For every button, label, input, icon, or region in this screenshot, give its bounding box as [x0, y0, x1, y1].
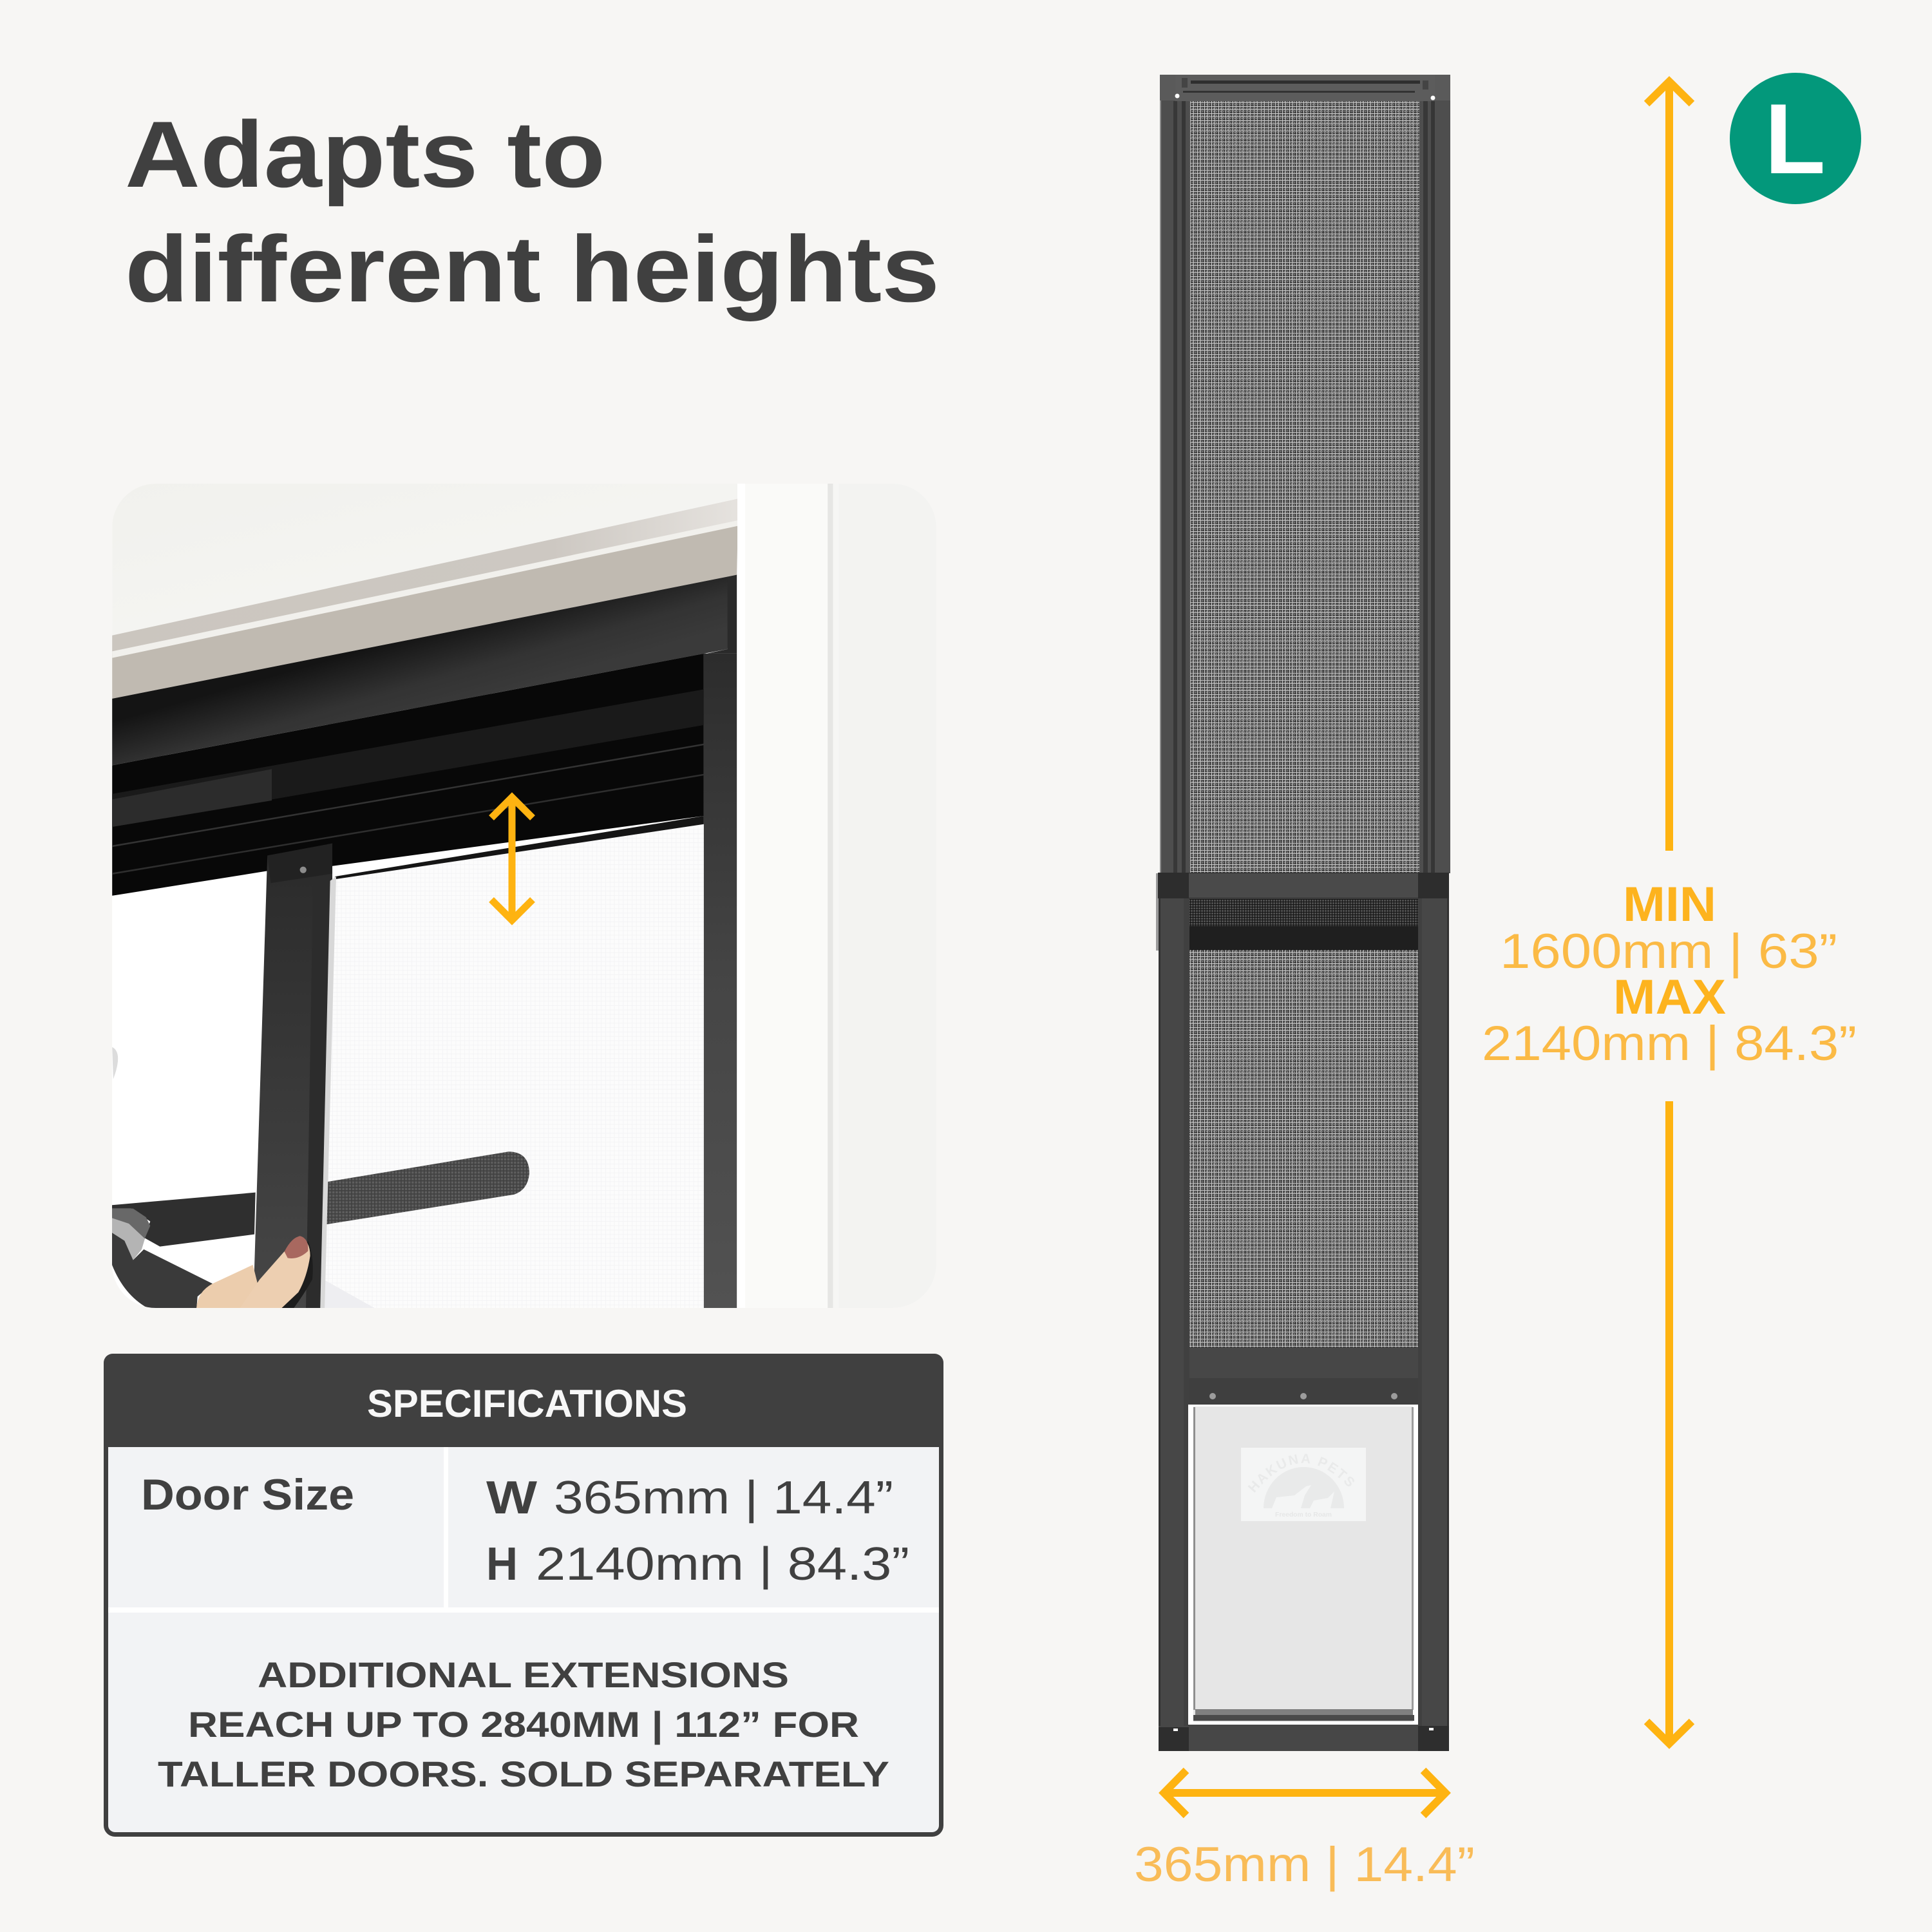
door size values: 365mm | 14.4”: [554, 1472, 893, 1524]
height dimensions: MIN: [1623, 877, 1716, 932]
flap logo: [1241, 1448, 1366, 1521]
photo: window frame with screen being adjusted: [112, 484, 833, 1308]
table body: [106, 1356, 942, 1834]
height arrow: [1647, 81, 1692, 1744]
table header: [104, 1354, 943, 1447]
extensions note: ADDITIONAL EXTENSIONS: [258, 1654, 789, 1695]
icon: double arrow on photo: [491, 797, 533, 920]
title: different heights: [125, 216, 940, 321]
pet flap: [1188, 1405, 1418, 1725]
door size values: 2140mm | 84.3”: [536, 1539, 909, 1590]
door size values: W: [486, 1472, 537, 1524]
width dimension: 365mm | 14.4”: [1134, 1837, 1475, 1892]
height dimensions: [1482, 877, 1857, 1071]
size badge L: L: [1765, 83, 1826, 194]
title: Adapts to: [125, 102, 605, 207]
door size values: H: [486, 1539, 518, 1590]
height dimensions: 2140mm | 84.3”: [1482, 1016, 1857, 1071]
lower mesh screen: [1189, 950, 1418, 1347]
extensions note: REACH UP TO 2840MM | 112” FOR: [188, 1704, 859, 1745]
velcro strip: [1189, 926, 1418, 950]
height dimensions: MAX: [1613, 970, 1726, 1025]
height dimensions: 1600mm | 63”: [1500, 924, 1837, 979]
upper mesh screen: [1190, 101, 1419, 873]
extensions note: [158, 1654, 889, 1794]
product: pet door panel: [1156, 75, 1450, 1751]
width arrow: [1164, 1770, 1445, 1815]
middle joint band: [1158, 873, 1449, 898]
door size label: Door Size: [141, 1470, 354, 1519]
specifications table: [104, 1354, 943, 1834]
extensions note: TALLER DOORS. SOLD SEPARATELY: [158, 1754, 889, 1794]
bottom frame band: [1159, 1726, 1449, 1751]
size badge L: [1730, 73, 1861, 204]
flap logo: HAKUNA PETS: [1248, 1454, 1354, 1493]
upper extension frame: [1156, 75, 1450, 951]
dividers: [108, 1447, 939, 1613]
dark mesh section: [1189, 899, 1418, 927]
flap mount plate: [1189, 1349, 1418, 1405]
door size values: [486, 1472, 909, 1590]
hand and arm detail: [109, 1193, 313, 1311]
frame edge shadows: [1159, 898, 1449, 1751]
title: [125, 102, 940, 321]
flap logo: Freedom to Roam: [1275, 1511, 1332, 1519]
header label: SPECIFICATIONS: [367, 1382, 687, 1425]
lower frame: [1159, 898, 1449, 1751]
